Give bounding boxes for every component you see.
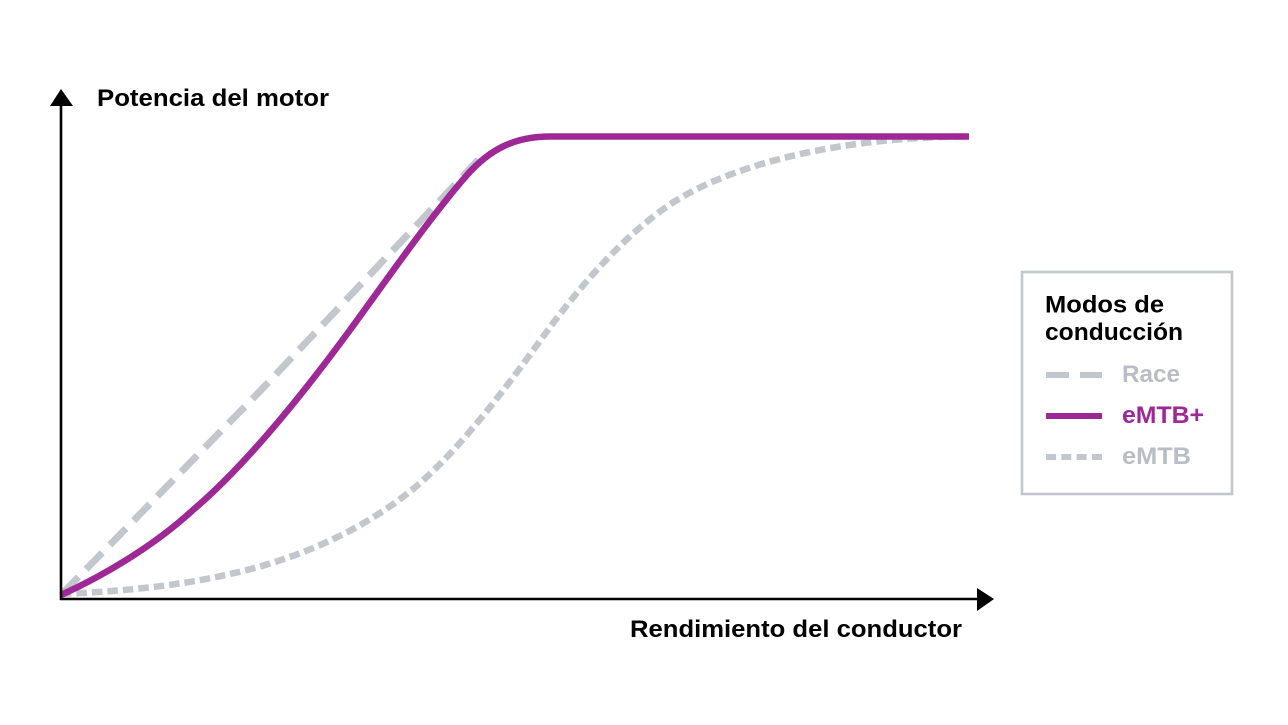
legend panel xyxy=(1022,272,1232,494)
curve: Race xyxy=(61,158,480,595)
legend title: conducción xyxy=(1045,319,1183,346)
legend item: eMTB+: eMTB+ xyxy=(1122,402,1204,429)
legend title: Modos de xyxy=(1045,292,1164,318)
y axis title: Potencia del motor xyxy=(97,85,329,112)
legend item: Race xyxy=(1046,361,1180,388)
legend item: Race: Race xyxy=(1122,361,1180,388)
x axis title: Rendimiento del conductor xyxy=(630,616,962,643)
x axis arrow xyxy=(60,588,994,611)
y axis arrow xyxy=(50,89,73,600)
curve: eMTB+ xyxy=(61,136,969,595)
curve: eMTB xyxy=(61,136,968,594)
legend item: eMTB: eMTB xyxy=(1122,443,1191,470)
legend frame xyxy=(1022,272,1232,494)
